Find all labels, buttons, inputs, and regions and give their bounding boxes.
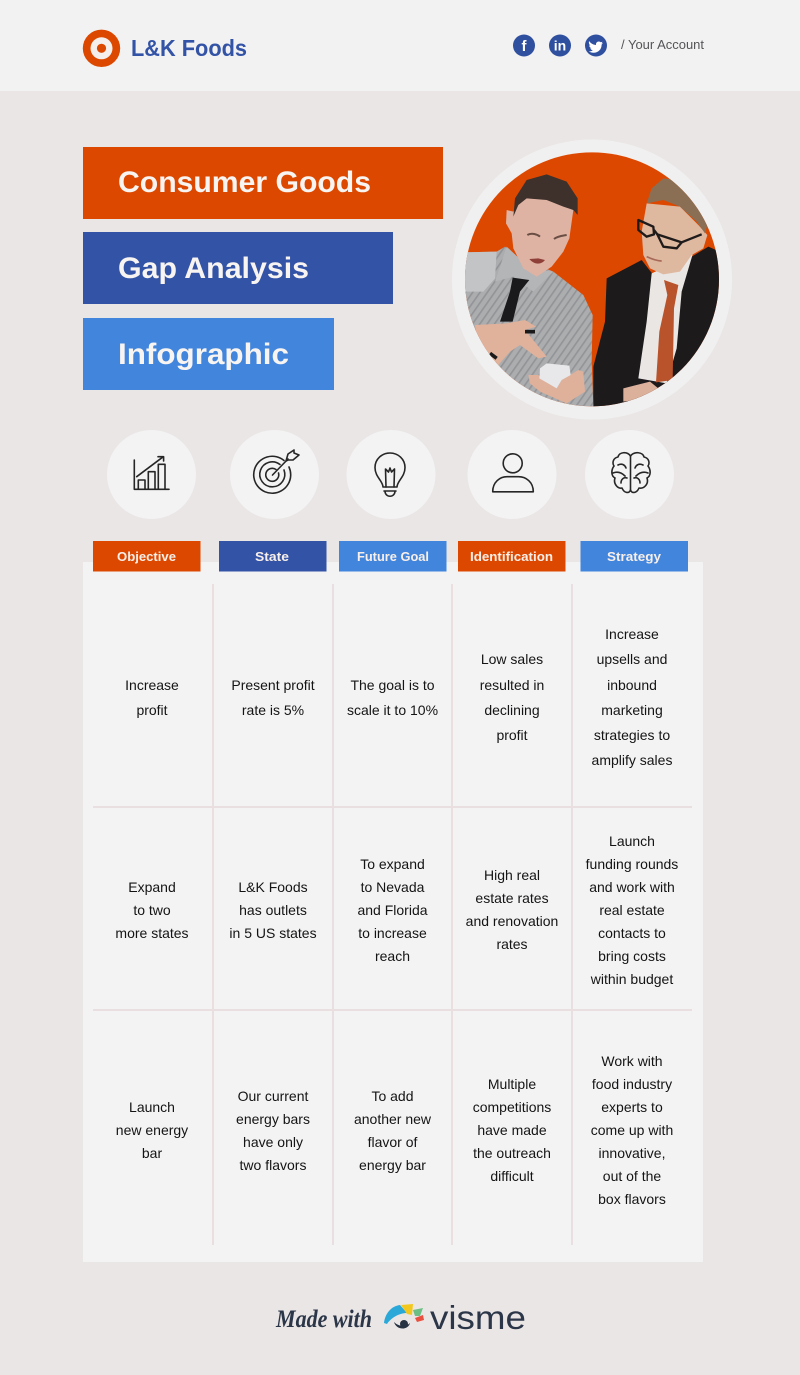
- icon badge: target with dart: [230, 430, 319, 519]
- row 3 future goal: flavor of: [368, 1134, 418, 1150]
- row 1 strategy: amplify sales: [592, 752, 672, 768]
- icon badge: brain: [585, 430, 674, 519]
- column header: Objective: Objective: [117, 550, 176, 564]
- phone hand: [528, 370, 585, 403]
- right man tie: [656, 280, 678, 382]
- visme wordmark: visme: [430, 1299, 526, 1336]
- row 2 future goal: and Florida: [357, 902, 428, 918]
- column header: Strategy: Strategy: [607, 550, 661, 564]
- column header: Strategy: [580, 541, 688, 572]
- row 2 strategy: Launch: [609, 833, 655, 849]
- row 1 strategy: upsells and: [597, 651, 667, 667]
- row 2 objective: to two: [133, 902, 171, 918]
- icon: brand logo target: [83, 30, 120, 67]
- icon: facebook: [513, 34, 535, 56]
- icon: linkedin: [549, 34, 571, 56]
- row 1 strategy: strategies to: [594, 727, 670, 743]
- row 1 state: Present profit: [231, 677, 315, 693]
- icon badge: light bulb: [346, 430, 436, 519]
- row 1 state: rate is 5%: [242, 702, 304, 718]
- row 3 strategy: Work with: [601, 1053, 663, 1069]
- icon: facebook: f: [522, 38, 528, 55]
- row 3 identification: competitions: [473, 1099, 551, 1115]
- row 2 identification: estate rates: [475, 890, 549, 906]
- row 3 identification: [473, 1076, 551, 1184]
- row 3 future goal: [354, 1088, 432, 1173]
- footer: made with visme: Made with: [275, 1306, 372, 1333]
- row 2 state: [229, 879, 317, 941]
- row 1 objective: Increase: [125, 677, 179, 693]
- phone: [539, 363, 571, 388]
- row 2 future goal: to Nevada: [361, 879, 425, 895]
- row 2 objective: [115, 879, 189, 941]
- right man hair: [647, 178, 707, 233]
- row 3 objective: [116, 1099, 188, 1161]
- row 3 state: energy bars: [236, 1111, 310, 1127]
- icon badge: growth chart: [107, 430, 196, 519]
- row 2 identification: High real: [484, 867, 540, 883]
- row 2 strategy: [586, 833, 678, 987]
- brand name: L&K Foods: [131, 35, 247, 61]
- right man mouth: [647, 257, 662, 261]
- column header: State: State: [255, 550, 289, 564]
- title banner: Gap Analysis: [83, 232, 393, 304]
- title banner: Infographic: Infographic: [118, 338, 289, 371]
- row 1 strategy: Increase: [605, 626, 659, 642]
- row 3 identification: Multiple: [488, 1076, 536, 1092]
- right man shirt: [638, 254, 693, 383]
- row 2 identification: rates: [496, 936, 528, 952]
- icon: linkedin: in: [554, 38, 566, 54]
- row 2 state: in 5 US states: [229, 925, 317, 941]
- account link: / Your Account: [621, 37, 704, 52]
- row 1 state: [231, 677, 315, 718]
- row 3 strategy: come up with: [591, 1122, 673, 1138]
- column header: State: [219, 541, 326, 572]
- row 3 objective: new energy: [116, 1122, 188, 1138]
- column header: Future Goal: [339, 541, 446, 572]
- row 2 identification: [466, 867, 558, 952]
- row 2 strategy: contacts to: [598, 925, 666, 941]
- left man shirt: [465, 246, 594, 406]
- left man tie: [500, 278, 529, 322]
- row 1 identification: declining: [484, 702, 540, 718]
- icon: twitter: [585, 34, 607, 56]
- row 3 strategy: out of the: [603, 1168, 661, 1184]
- row 3 state: Our current: [238, 1088, 309, 1104]
- row 2 strategy: real estate: [599, 902, 665, 918]
- row 1 objective: [125, 677, 179, 718]
- title banner: Consumer Goods: [83, 147, 443, 219]
- row 3 future goal: another new: [354, 1111, 432, 1127]
- row 1 strategy: inbound: [607, 677, 657, 693]
- right man jacket: [593, 246, 719, 406]
- row 1 strategy: marketing: [601, 702, 663, 718]
- table panel: [83, 541, 703, 1262]
- row 1 identification: resulted in: [480, 677, 544, 693]
- row 3 identification: difficult: [490, 1168, 534, 1184]
- row 3 future goal: To add: [371, 1088, 414, 1104]
- title banner: Consumer Goods: Consumer Goods: [118, 166, 371, 199]
- column header: Identification: Identification: [470, 550, 553, 564]
- right man face: [642, 203, 707, 274]
- left man pointing hand: [475, 320, 547, 365]
- row 1 identification: Low sales: [481, 651, 543, 667]
- row 3 strategy: experts to: [601, 1099, 663, 1115]
- row 2 objective: Expand: [128, 879, 176, 895]
- row 3 identification: have made: [477, 1122, 547, 1138]
- row 2 future goal: To expand: [360, 856, 425, 872]
- row 2 strategy: bring costs: [598, 948, 666, 964]
- row 3 objective: Launch: [129, 1099, 175, 1115]
- row 2 strategy: within budget: [590, 971, 673, 987]
- row 1 future goal: The goal is to: [350, 677, 435, 693]
- row 2 state: has outlets: [239, 902, 307, 918]
- row 3 state: [236, 1088, 310, 1173]
- row 1 future goal: scale it to 10%: [347, 702, 438, 718]
- row 3 future goal: energy bar: [359, 1157, 426, 1173]
- column header: Objective: [93, 541, 200, 572]
- row 2 future goal: [357, 856, 428, 964]
- left man hair: [513, 174, 578, 217]
- column header: Future Goal: Future Goal: [357, 550, 429, 564]
- row 1 identification: [480, 651, 544, 743]
- row 3 strategy: innovative,: [599, 1145, 665, 1161]
- footer: made with visme: [275, 1299, 526, 1336]
- row 2 identification: and renovation: [466, 913, 558, 929]
- row 3 objective: bar: [142, 1145, 162, 1161]
- row 2 future goal: to increase: [358, 925, 427, 941]
- left man collar: [495, 247, 553, 292]
- icon: visme logo: [384, 1304, 424, 1329]
- row 2 state: L&K Foods: [238, 879, 308, 895]
- left man eyes and mouth: [527, 234, 567, 264]
- row 3 strategy: [591, 1053, 673, 1207]
- right man glasses: [638, 220, 702, 248]
- photo: two businessmen looking at a phone: [450, 135, 740, 425]
- pen: [490, 332, 535, 358]
- right man hand: [623, 382, 658, 402]
- row 1 future goal: [347, 677, 438, 718]
- left man face: [506, 197, 573, 277]
- row 1 identification: profit: [496, 727, 528, 743]
- title banner: Gap Analysis: Gap Analysis: [118, 252, 309, 285]
- row 2 future goal: reach: [375, 948, 410, 964]
- row 3 strategy: box flavors: [598, 1191, 666, 1207]
- icon badge: person: [468, 430, 556, 519]
- row 1 objective: profit: [136, 702, 168, 718]
- row 3 strategy: food industry: [592, 1076, 672, 1092]
- row 2 strategy: and work with: [589, 879, 675, 895]
- title banner: Infographic: [83, 318, 334, 390]
- row 3 identification: the outreach: [473, 1145, 551, 1161]
- row 2 strategy: funding rounds: [586, 856, 678, 872]
- row 3 state: two flavors: [240, 1157, 306, 1173]
- row 1 strategy: [592, 626, 672, 768]
- header bar: [0, 0, 800, 91]
- column header: Identification: [458, 541, 566, 572]
- row 2 objective: more states: [115, 925, 189, 941]
- row 3 state: have only: [243, 1134, 303, 1150]
